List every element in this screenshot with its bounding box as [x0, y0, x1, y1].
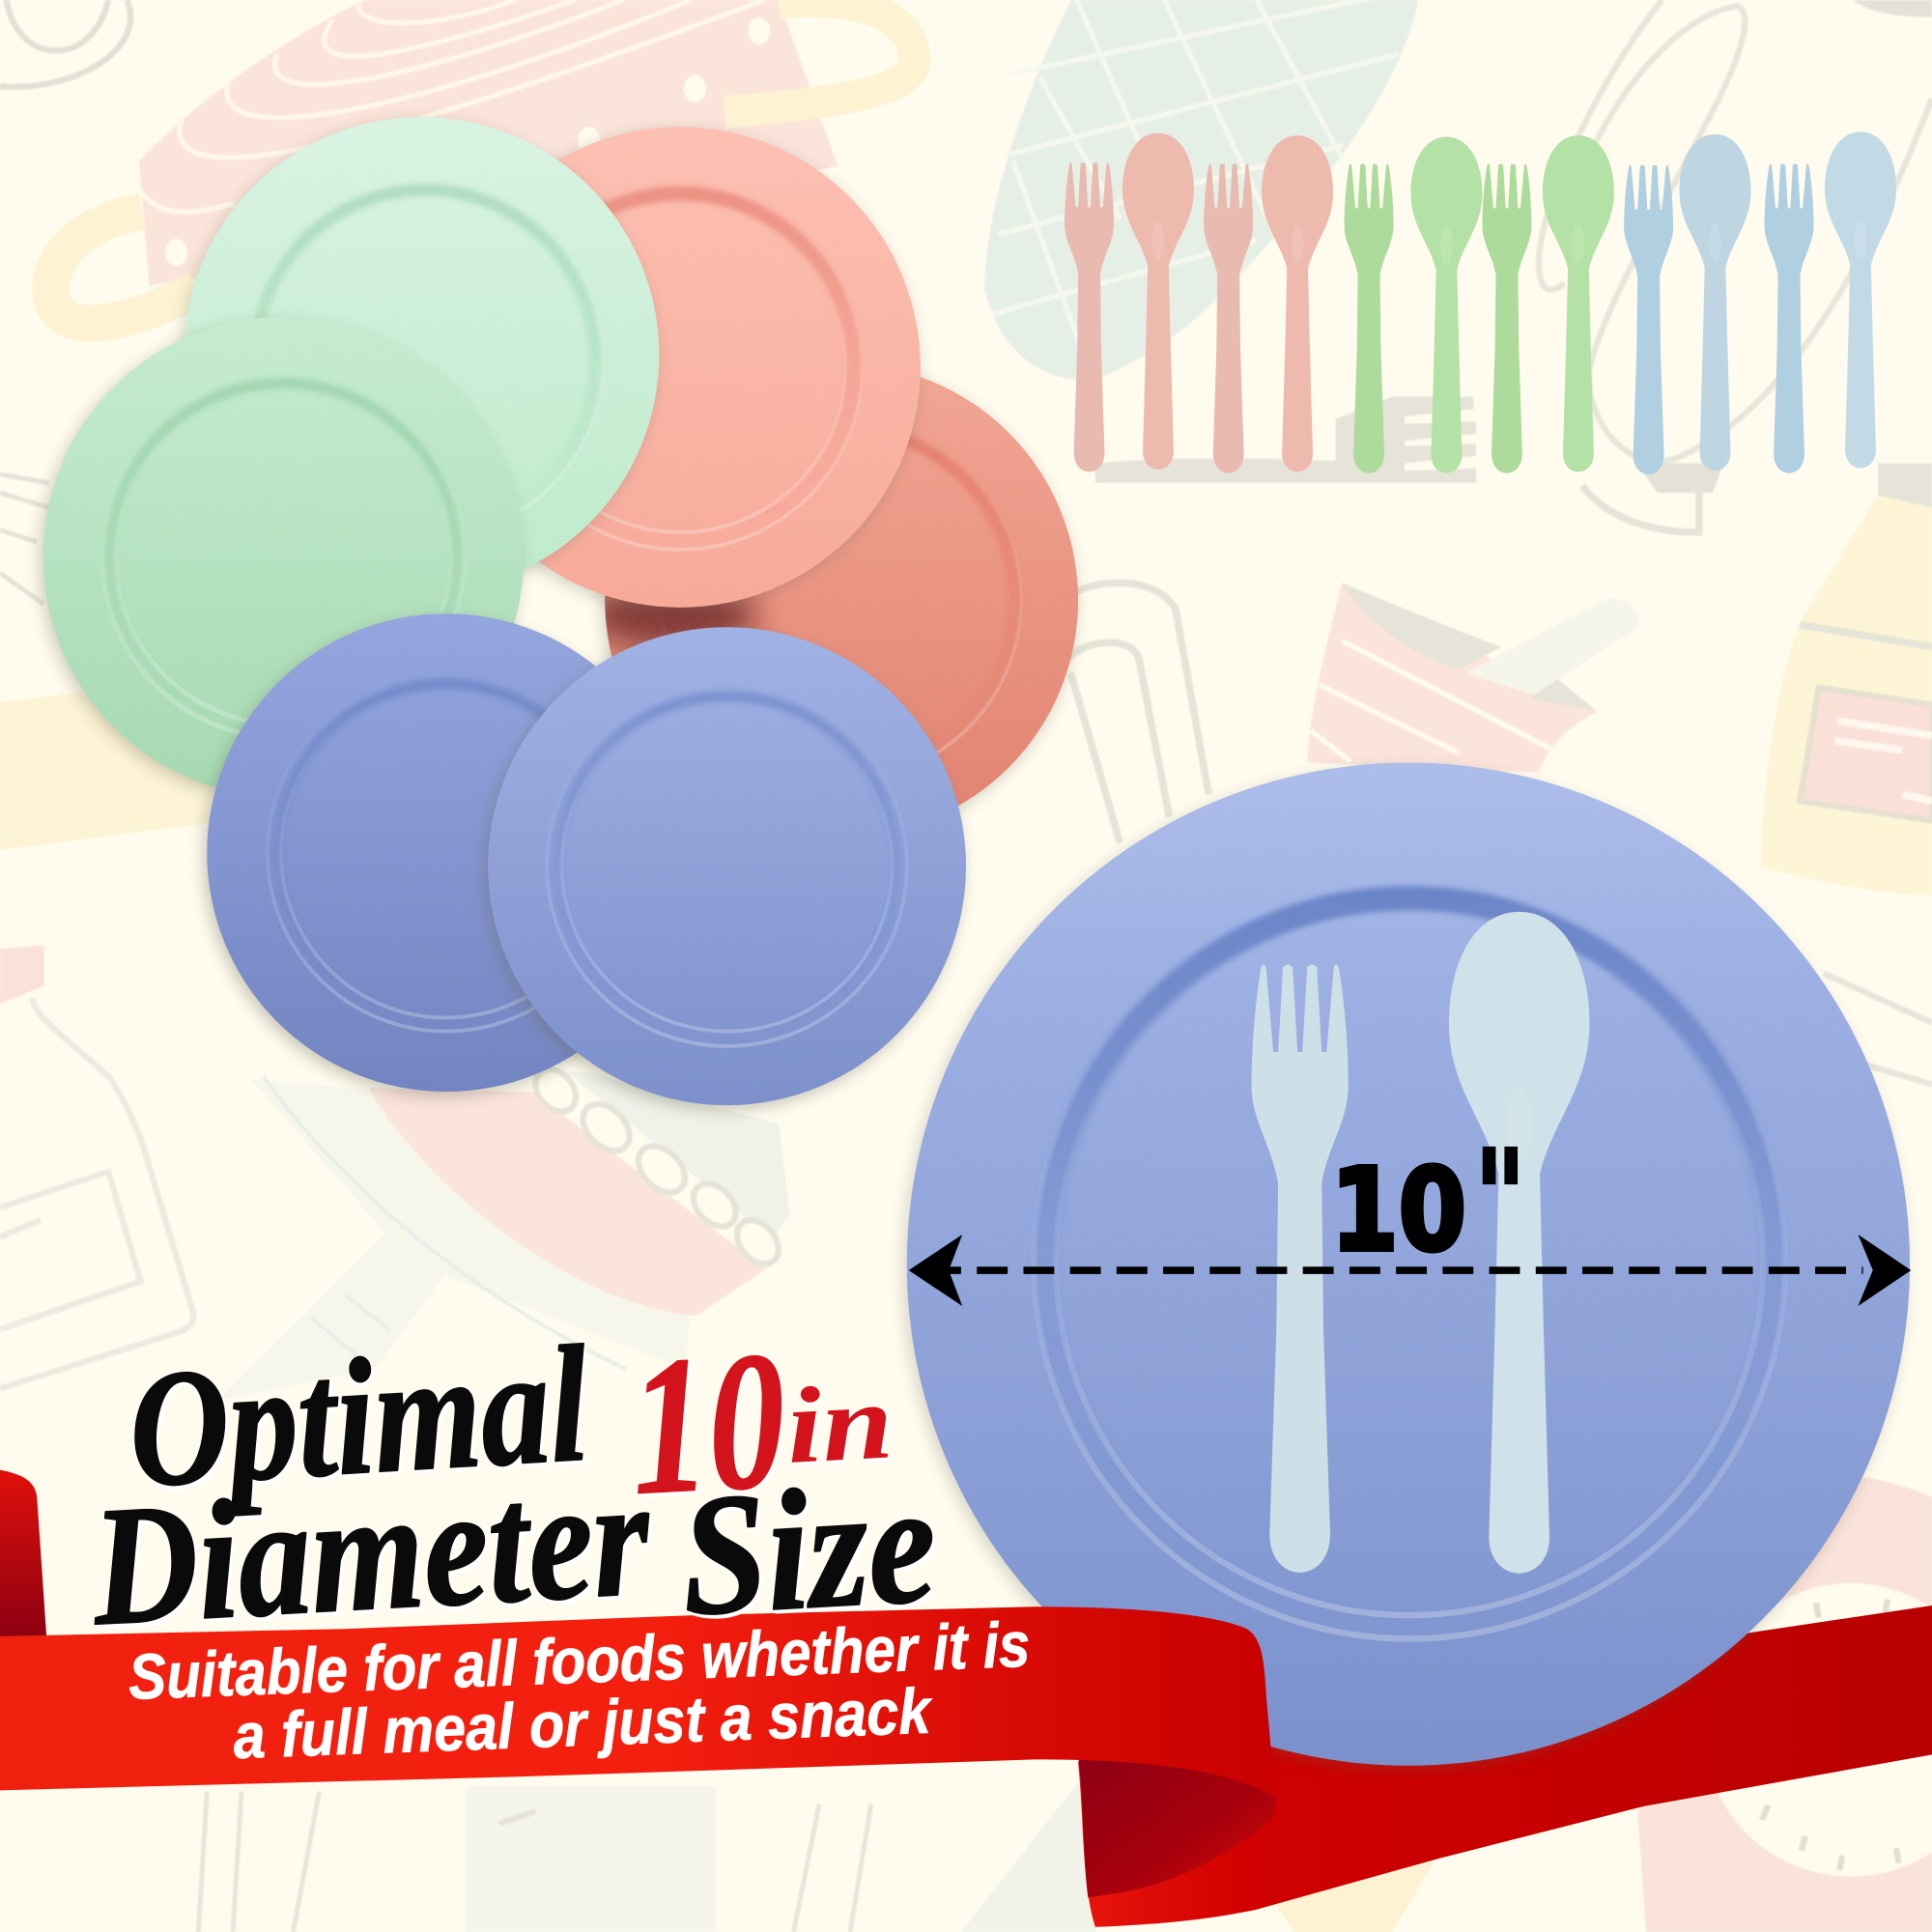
oven mitt — [984, 0, 1418, 380]
ribbon front band — [0, 1606, 1275, 1797]
ribbon fold shadow — [1078, 1756, 1275, 1897]
subtitle line 2: a full meal or just a snack — [232, 1676, 934, 1773]
diameter label: " — [1474, 1122, 1526, 1276]
plate: green front — [40, 317, 524, 802]
plate: salmon — [585, 363, 1078, 840]
diameter arrow — [909, 1235, 1911, 1306]
right jar — [1761, 496, 1932, 895]
blue cutlery — [1624, 131, 1896, 474]
pot top — [139, 0, 838, 286]
headline word: Diameter: Diameter — [86, 1442, 656, 1662]
headline word: 10: 10 — [625, 1311, 790, 1537]
center right pot — [1307, 582, 1597, 773]
plates group: six stacked plates — [40, 117, 1078, 1110]
headline word: Optimal: Optimal — [125, 1312, 593, 1522]
cutlery row: six forks and six spoons — [1065, 131, 1896, 474]
headline word: in: in — [783, 1361, 895, 1487]
diameter label — [1331, 1122, 1526, 1276]
plate: mint back — [182, 117, 659, 596]
pink cutlery — [1065, 133, 1333, 473]
plate: blue back — [203, 613, 685, 1096]
toaster arcs — [1067, 582, 1208, 842]
green cutlery — [1345, 135, 1614, 473]
plate: blue front — [484, 627, 966, 1110]
lower centre bowl — [216, 1079, 690, 1401]
left yellow patch — [0, 690, 215, 850]
plate body — [903, 763, 1910, 1771]
large spoon — [1449, 912, 1589, 1574]
diameter label: 10 — [1331, 1144, 1466, 1276]
headline — [86, 1311, 941, 1662]
large fork — [1252, 965, 1349, 1573]
top right curved outlines — [1539, 0, 1932, 461]
fork shadow shape behind cutlery — [1095, 397, 1476, 483]
bottom right clock — [1637, 1475, 1932, 1932]
plate: pink — [438, 127, 921, 611]
ribbon left back piece — [0, 1470, 46, 1641]
subtitle line 1: Suitable for all foods whether it is — [128, 1609, 1032, 1714]
left bottle — [0, 998, 193, 1389]
headline word: Size: Size — [676, 1446, 941, 1652]
ribbon subtitle — [128, 1609, 1032, 1773]
ribbon tail behind large plate — [1078, 1605, 1932, 1927]
bottom objects — [466, 1786, 716, 1932]
large plate with cutlery — [903, 763, 1910, 1771]
